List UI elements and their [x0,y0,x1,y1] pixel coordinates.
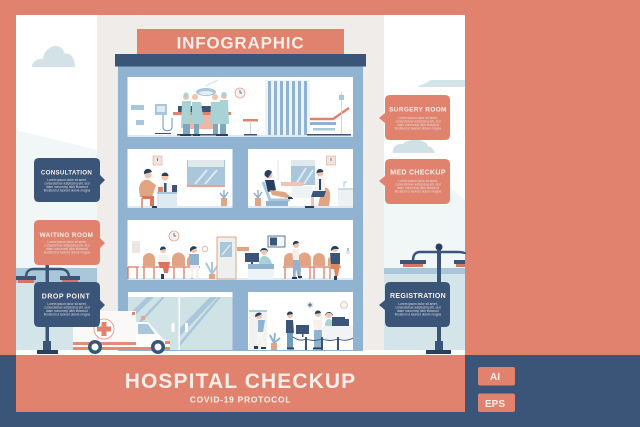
icon: stool [243,119,258,136]
bottom navy band [0,355,640,427]
icon: street lamp left [16,265,80,354]
panel: hospital building [115,54,366,351]
icon: sanitizer [346,248,350,254]
icon: wall shelves [131,105,144,125]
callout: med checkup: diam nonummy nibh euismod [397,186,439,190]
callout: consultation: CONSULTATION [41,170,92,176]
callout: consultation: tincidunt ut laoreet dolore magna [44,188,90,192]
banner: infographic: INFOGRAPHIC [177,34,304,52]
callout: waiting room: diam nonummy nibh euismod [46,247,88,251]
curtain [265,80,310,135]
panel: consultation room [128,149,232,208]
wall poster [132,241,140,253]
callout: surgery room: Lorem ipsum dolor sit amet, [398,116,438,120]
surgeons [180,92,229,136]
patient [139,169,160,208]
callout: med checkup: consectetuer adipiscing elit, sed [395,182,441,186]
callout: waiting room: consectetuer adipiscing elit, sed [44,244,90,248]
desk [157,185,177,208]
doctor [305,169,330,208]
icon: clock [340,302,348,308]
callout: waiting room: Lorem ipsum dolor sit amet, [47,240,87,244]
callout: surgery room: diam nonummy nibh euismod [397,123,439,127]
icon: clock [326,156,336,165]
man at counter [313,310,323,350]
callout: med checkup [379,159,450,204]
icon: plant [220,190,228,206]
seated woman [189,246,199,278]
icon: plant [206,262,218,279]
callout: med checkup: tincidunt ut laoreet dolore magna [395,190,441,194]
man in navy [286,311,294,350]
callout: waiting room: WAITING ROOM [40,232,93,239]
seated woman [330,246,340,280]
callout: consultation: consectetuer adipiscing elit, sed [44,182,90,186]
icon: street lamp right [400,244,465,354]
callout: registration: Lorem ipsum dolor sit amet, [398,302,438,306]
icon: plant [254,190,262,206]
panel: scene backdrop [16,15,465,355]
icon: sign [306,302,314,308]
icon: wall clock [235,88,245,98]
icon: no smoking sign [202,246,208,252]
callout: drop point: consectetuer adipiscing elit, sed [44,306,90,310]
door [249,310,267,350]
badge: AI [478,367,515,386]
title panel: hospital checkup: HOSPITAL CHECKUP [125,370,356,393]
cabinet [338,182,353,206]
icon: operating table [173,106,231,136]
panel: registration room [248,292,353,350]
badge: EPS: EPS [485,399,505,410]
badge: EPS [478,394,515,412]
window [187,160,225,187]
seated man [158,246,170,279]
callout: surgery room: consectetuer adipiscing elit, sed [395,120,441,124]
callout: registration [379,282,450,327]
callout: registration: consectetuer adipiscing elit, sed [395,306,441,310]
equipment counter [281,182,312,198]
door sign [237,247,249,251]
callout: registration: tincidunt ut laoreet dolore magna [395,312,441,316]
reception desk [245,248,274,279]
reception counter [323,326,353,340]
monitor [296,325,309,337]
callout: surgery room: tincidunt ut laoreet dolore magna [395,126,441,130]
receptionist [325,312,333,326]
icon: cloud top right [417,80,465,87]
information screen [268,236,285,247]
callout: med checkup: Lorem ipsum dolor sit amet, [398,179,438,183]
queue stanchions [293,337,353,350]
panel: waiting room [128,220,353,280]
panel: surgery room [128,77,353,137]
doctor [160,173,172,194]
standing woman [254,313,266,349]
callout: registration: REGISTRATION [390,293,446,300]
icon: clock [153,156,162,165]
callout: drop point [34,282,105,327]
panel: drop point glass doors [128,292,232,350]
icon: ambulance [73,311,170,354]
banner: infographic [137,29,344,54]
icon: plant [270,333,280,350]
callout: waiting room: tincidunt ut laoreet dolore magna [44,250,90,254]
callout: drop point: tincidunt ut laoreet dolore magna [44,312,90,316]
callout: waiting room [34,220,105,265]
icon: medical monitor [155,104,172,134]
callout: surgery room [379,95,450,140]
callout: consultation: Lorem ipsum dolor sit amet, [47,178,87,182]
title panel: hospital checkup [16,355,465,412]
chairs left [128,253,200,279]
callout: med checkup: MED CHECKUP [390,170,446,176]
title panel: hospital checkup: COVID-19 PROTOCOL [190,394,291,404]
callout: registration: diam nonummy nibh euismod [397,309,439,313]
chairs right [283,253,341,279]
window [291,160,315,185]
callout: drop point: Lorem ipsum dolor sit amet, [47,302,87,306]
icon: clock [169,231,179,241]
callout: consultation: diam nonummy nibh euismod [46,185,88,189]
panel: med checkup room [248,149,353,208]
badge: AI: AI [490,372,500,383]
callout: drop point: diam nonummy nibh euismod [46,309,88,313]
callout: surgery room: SURGERY ROOM [389,106,447,114]
icon: cloud top left [32,46,75,67]
dental chair and patient [263,160,293,206]
icon: cloud right middle [393,140,435,153]
door [217,237,236,279]
icon: surgical lamp [196,80,218,96]
standing woman [292,241,302,279]
icon: hospital bed [307,92,351,136]
monitor [332,317,349,327]
callout: drop point: DROP POINT [42,294,90,300]
callout: consultation [34,158,105,202]
